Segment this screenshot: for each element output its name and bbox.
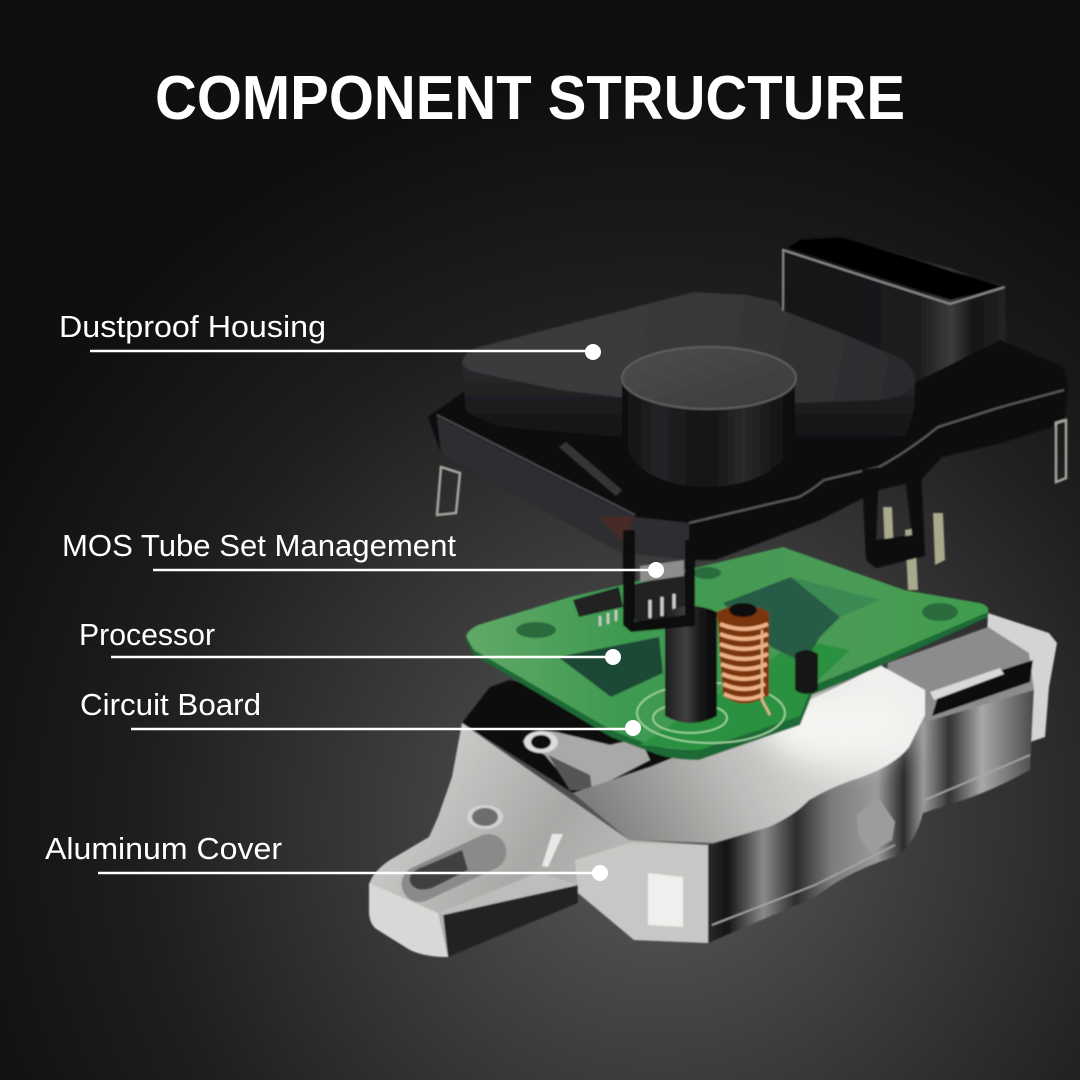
pins xyxy=(883,507,945,590)
callout: circuit board: Circuit Board xyxy=(80,687,261,722)
mounting post xyxy=(523,731,650,790)
top face xyxy=(573,665,925,843)
capacitor xyxy=(795,650,818,694)
rear interior wall xyxy=(880,627,1034,722)
legs xyxy=(437,467,460,515)
circuit board xyxy=(466,507,988,760)
callout: processor xyxy=(79,617,621,665)
side clip xyxy=(857,797,895,853)
copper coil xyxy=(717,603,770,715)
aluminum cover xyxy=(369,613,1057,957)
title: COMPONENT STRUCTURE xyxy=(155,64,905,133)
front band xyxy=(689,390,1064,560)
mounting brackets xyxy=(623,467,925,632)
callout: circuit board xyxy=(80,687,641,736)
callout: dustproof housing: Dustproof Housing xyxy=(59,309,326,344)
dustproof housing xyxy=(428,235,1068,632)
recess xyxy=(462,680,680,793)
front right wall xyxy=(708,690,1034,943)
housing top face xyxy=(462,292,915,403)
wedge highlight xyxy=(559,442,622,496)
callout: mos tube set management xyxy=(62,528,664,578)
flange xyxy=(428,340,1068,560)
housing connector xyxy=(782,235,1007,385)
central cap xyxy=(622,347,796,487)
left flange and mounting tab xyxy=(369,723,708,957)
callout: aluminum cover: Aluminum Cover xyxy=(45,831,282,866)
callout: processor: Processor xyxy=(79,617,215,652)
left wall xyxy=(437,417,689,560)
callout: aluminum cover xyxy=(45,831,608,881)
processor chips area xyxy=(558,637,663,697)
tab front and underside xyxy=(443,885,578,957)
lobes xyxy=(462,367,915,470)
connector chip xyxy=(573,587,623,617)
board holes xyxy=(516,622,556,638)
front white clip xyxy=(648,873,683,927)
callout: dustproof housing xyxy=(59,309,601,360)
callout: mos tube set management: MOS Tube Set Management xyxy=(62,528,456,563)
exploded device illustration xyxy=(369,235,1068,957)
right bracket xyxy=(985,613,1057,742)
slot xyxy=(396,828,512,908)
mos chip xyxy=(632,572,688,628)
alignment ridge xyxy=(542,834,563,867)
trace rings xyxy=(637,683,785,743)
black cylinder xyxy=(665,606,717,723)
